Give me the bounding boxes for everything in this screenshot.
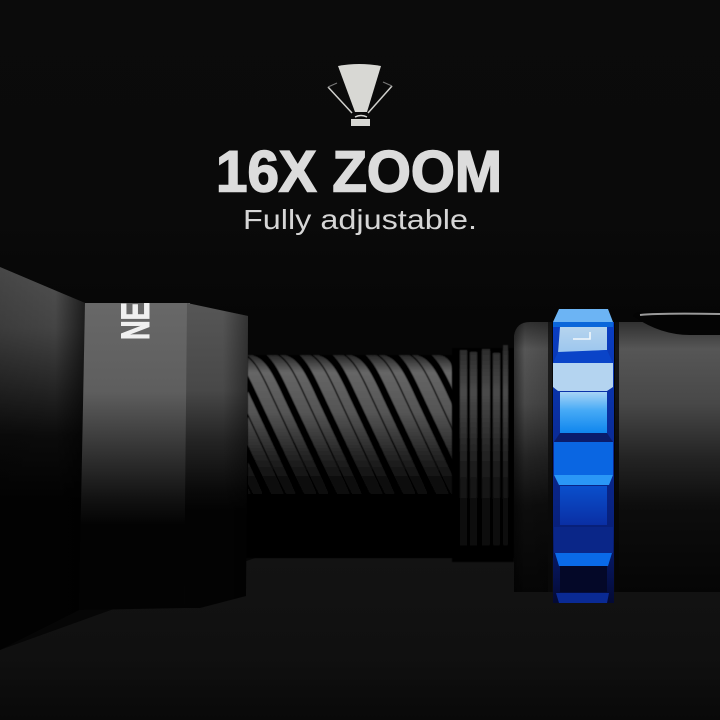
mid blue facet: [560, 486, 607, 525]
brand lettering: NEB: [114, 283, 158, 340]
threaded flashlight neck: [248, 354, 452, 476]
gradient facet: [560, 392, 607, 433]
head cone: [0, 267, 85, 650]
head band: [79, 303, 190, 610]
ring contact shadows: [548, 322, 553, 592]
ribbed rings: [452, 345, 514, 562]
light facet: [553, 363, 613, 391]
blue knurled ring: [553, 309, 614, 603]
flashlight body: [514, 312, 720, 592]
flashlight head: [0, 267, 248, 610]
icon: zoom beam: [328, 64, 392, 126]
subtitle: Fully adjustable.: [243, 204, 477, 235]
shadow facet: [560, 566, 607, 592]
facet with L mark: [558, 327, 607, 353]
head collar: [184, 303, 248, 608]
ring cap facet: [553, 309, 613, 322]
saturated facet: [554, 442, 613, 475]
dark facet: [554, 527, 613, 553]
ring bottom: [556, 593, 609, 603]
infographic canvas: [0, 64, 720, 615]
floor surface: [0, 558, 720, 720]
title: 16X ZOOM: [216, 140, 502, 204]
switch recess: [633, 312, 720, 335]
